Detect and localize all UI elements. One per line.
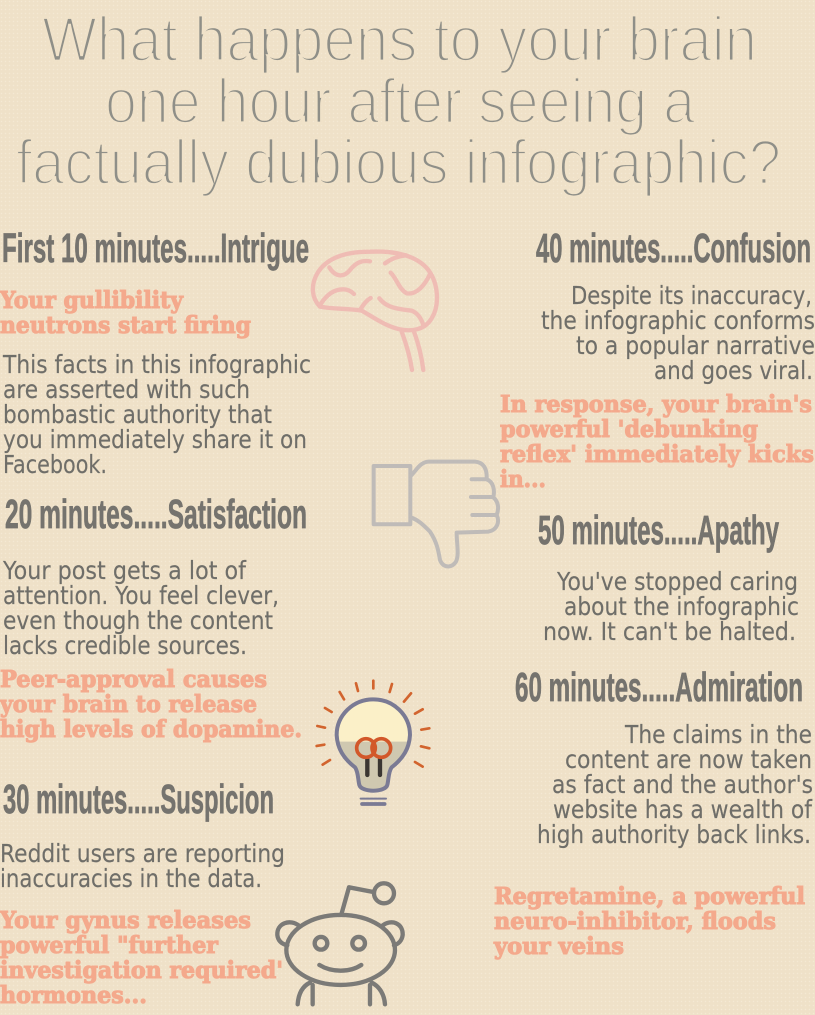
callout: regretamine: Regretamine, a powerful xyxy=(494,882,805,910)
text block: reddit users: Reddit users are reporting xyxy=(0,839,285,868)
text block: post attention: lacks credible sources. xyxy=(3,631,247,660)
text block: share on Facebook: are asserted with such xyxy=(3,375,250,404)
filament supports xyxy=(367,759,380,775)
text block: post attention: Your post gets a lot of xyxy=(2,556,247,585)
callout: gullibility neutrons xyxy=(0,286,251,339)
panel: 40 minutes xyxy=(500,225,815,493)
callout: regretamine xyxy=(493,882,805,960)
heading: first 10 minutes: First 10 minutes.....Intrigue xyxy=(2,225,309,271)
callout: dopamine: high levels of dopamine. xyxy=(0,715,302,743)
panel: 50 minutes xyxy=(538,507,799,646)
callout: regretamine: neuro-inhibitor, floods xyxy=(494,907,776,935)
icon: brain xyxy=(313,252,437,370)
callout: debunking reflex xyxy=(500,390,814,493)
panel: first 10 minutes xyxy=(0,225,311,479)
callout: debunking reflex: powerful 'debunking xyxy=(500,415,758,443)
text block: post attention: even though the content xyxy=(3,606,273,635)
icon: thumbs down xyxy=(374,462,498,566)
panel: 20 minutes xyxy=(0,491,307,743)
callout: gynus hormones xyxy=(0,906,283,1009)
title xyxy=(16,5,781,198)
text block: post attention xyxy=(2,556,279,660)
text block: share on Facebook: This facts in this infographic xyxy=(2,350,311,379)
text block: share on Facebook: bombastic authority that xyxy=(3,400,272,429)
title: one hour after seeing a xyxy=(105,67,696,137)
heading: 30 minutes: 30 minutes.....Suspicion xyxy=(3,776,274,822)
text block: reddit users: inaccuracies in the data. xyxy=(0,864,262,893)
callout: debunking reflex: in... xyxy=(500,465,546,493)
callout: dopamine: your brain to release xyxy=(0,690,257,718)
bulb glass upper xyxy=(337,700,410,742)
callout: gynus hormones: Your gynus releases xyxy=(0,906,251,934)
panel: 60 minutes xyxy=(493,664,813,960)
callout: dopamine: Peer-approval causes xyxy=(0,665,267,693)
text block: reddit users xyxy=(0,839,285,893)
text block: share on Facebook xyxy=(2,350,311,479)
panel: 30 minutes xyxy=(0,776,285,1009)
text block: goes viral xyxy=(541,281,815,385)
bulb glass lower xyxy=(337,742,409,790)
icon: reddit alien xyxy=(277,883,403,1004)
bulb outline xyxy=(337,699,410,791)
callout: gynus hormones: powerful "further xyxy=(0,931,219,959)
light rays xyxy=(317,681,429,767)
text block: share on Facebook: Facebook. xyxy=(3,450,107,479)
bulb base xyxy=(361,796,386,802)
filament xyxy=(357,739,391,757)
text block: stopped caring xyxy=(543,567,799,646)
text block: post attention: attention. You feel clever, xyxy=(3,581,279,610)
callout: gynus hormones: investigation required' xyxy=(0,956,283,984)
callout: regretamine: your veins xyxy=(493,932,624,960)
text block: claims taken as fact xyxy=(537,720,813,849)
text block: share on Facebook: you immediately share it on xyxy=(3,425,307,454)
callout: gullibility neutrons: neutrons start firing xyxy=(0,311,251,339)
callout: gullibility neutrons: Your gullibility xyxy=(0,286,184,314)
icon: light bulb xyxy=(317,681,429,804)
callout: gynus hormones: hormones... xyxy=(0,981,147,1009)
heading: 20 minutes: 20 minutes.....Satisfaction xyxy=(5,491,307,537)
callout: dopamine xyxy=(0,665,302,743)
title: What happens to your brain xyxy=(42,5,757,75)
